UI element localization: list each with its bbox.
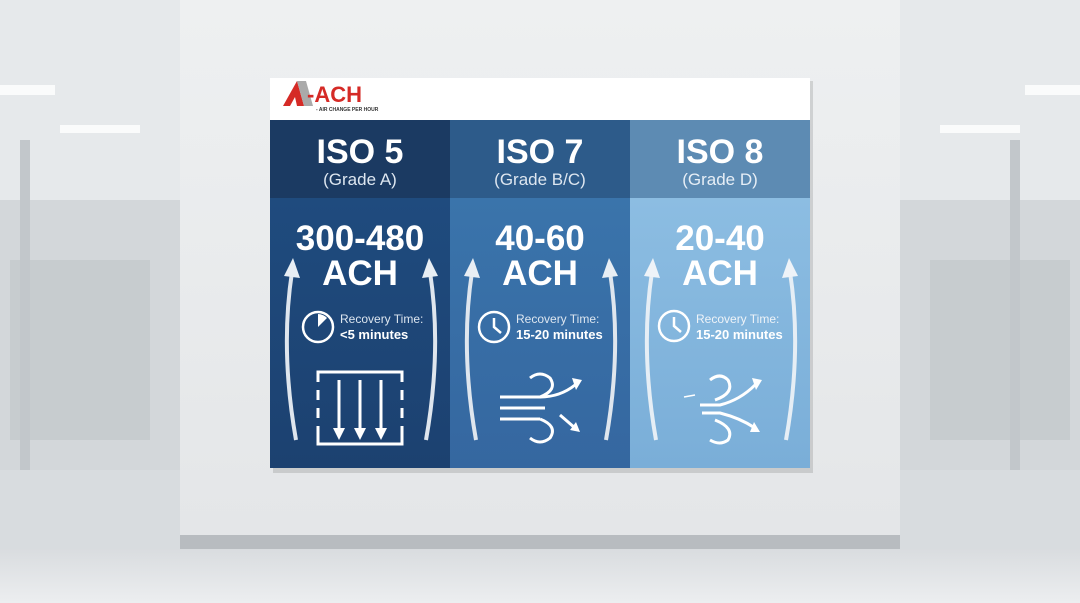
logo: -ACH xyxy=(307,82,362,107)
column: ISO 5: (Grade A) xyxy=(323,170,397,189)
column: ISO 7: 40-60 xyxy=(495,219,585,258)
logo: - AIR CHANGE PER HOUR xyxy=(316,107,379,113)
column: ISO 8: 15-20 minutes xyxy=(696,327,783,342)
column: ISO 8 xyxy=(630,120,810,468)
column: ISO 8: ISO 8 xyxy=(677,133,763,171)
logo xyxy=(283,81,379,113)
column: ISO 7: ACH xyxy=(502,254,578,293)
column: ISO 7: ISO 7 xyxy=(497,133,583,171)
column: ISO 7: 15-20 minutes xyxy=(516,327,603,342)
column: ISO 7: (Grade B/C) xyxy=(494,170,586,189)
column: ISO 5: 300-480 xyxy=(296,219,424,258)
column: ISO 7: Recovery Time: xyxy=(516,312,599,326)
column: ISO 5: ISO 5 xyxy=(317,133,403,171)
column: ISO 5: Recovery Time: xyxy=(340,312,423,326)
column: ISO 8: ACH xyxy=(682,254,758,293)
column: ISO 8: (Grade D) xyxy=(682,170,758,189)
column: ISO 5 xyxy=(270,120,450,468)
column: ISO 5: ACH xyxy=(322,254,398,293)
board xyxy=(270,78,813,473)
column: ISO 8: Recovery Time: xyxy=(696,312,779,326)
column: ISO 5: <5 minutes xyxy=(340,327,408,342)
column: ISO 8: 20-40 xyxy=(675,219,765,258)
column: ISO 7 xyxy=(450,120,630,468)
